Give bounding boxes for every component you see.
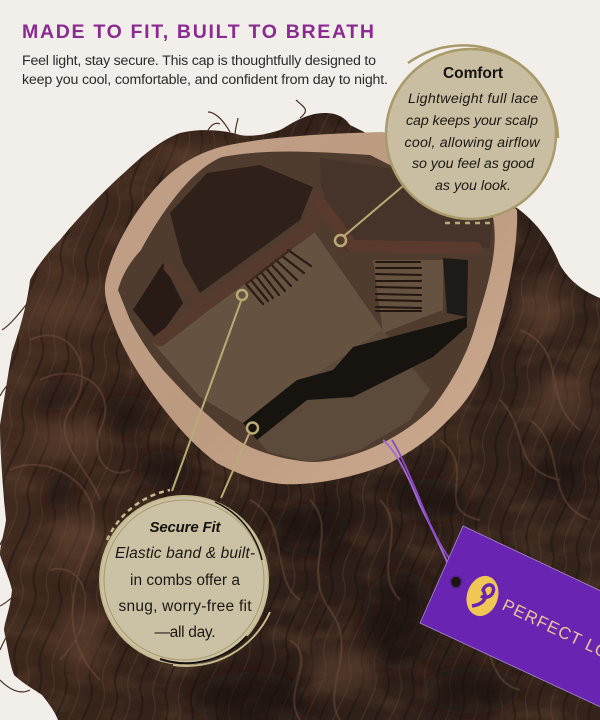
intro text [22,53,388,88]
secure fit body: in combs offer a [130,572,240,589]
callout: secure fit [100,490,270,666]
lace perimeter band [105,132,517,484]
cap seams [160,195,476,340]
comfort body: so you feel as good [412,156,535,172]
dark crown pocket [170,165,313,293]
callout: comfort [386,45,558,223]
intro text: Feel light, stay secure. This cap is thoughtfully designed to [22,53,376,69]
title: MADE TO FIT, BUILT TO BREATH [22,21,374,43]
taupe centre panel [153,230,383,423]
brand tag [420,526,600,716]
tag hole [450,576,462,588]
comfort body: Lightweight full lace [408,91,538,107]
brand logo [466,576,498,616]
secure fit heading: Secure Fit [150,519,222,536]
right side comb [376,262,421,311]
secure fit body: snug, worry-free fit [118,598,252,615]
leader line: comb [172,290,247,491]
cap interior [118,151,495,462]
comfort heading: Comfort [443,65,503,82]
small side pocket [133,263,183,340]
comfort body: cool, allowing airflow [404,135,540,151]
leader line: elastic band [221,422,258,498]
secure fit body: —all day. [154,624,216,641]
comfort body: as you look. [435,178,511,194]
intro text: keep you cool, comfortable, and confident from day to night. [22,72,388,88]
tag string [383,440,449,562]
wig cap [105,132,517,484]
leader line: comfort [335,186,403,246]
elastic band [243,258,468,440]
left side comb [246,250,311,304]
secure fit body [115,545,255,641]
stray wisps [0,100,306,692]
upper right mesh panel [320,158,493,252]
taupe right panel [373,260,443,333]
secure fit body: Elastic band & built- [115,545,255,562]
comfort body [404,91,540,194]
comfort body: cap keeps your scalp [406,113,538,129]
